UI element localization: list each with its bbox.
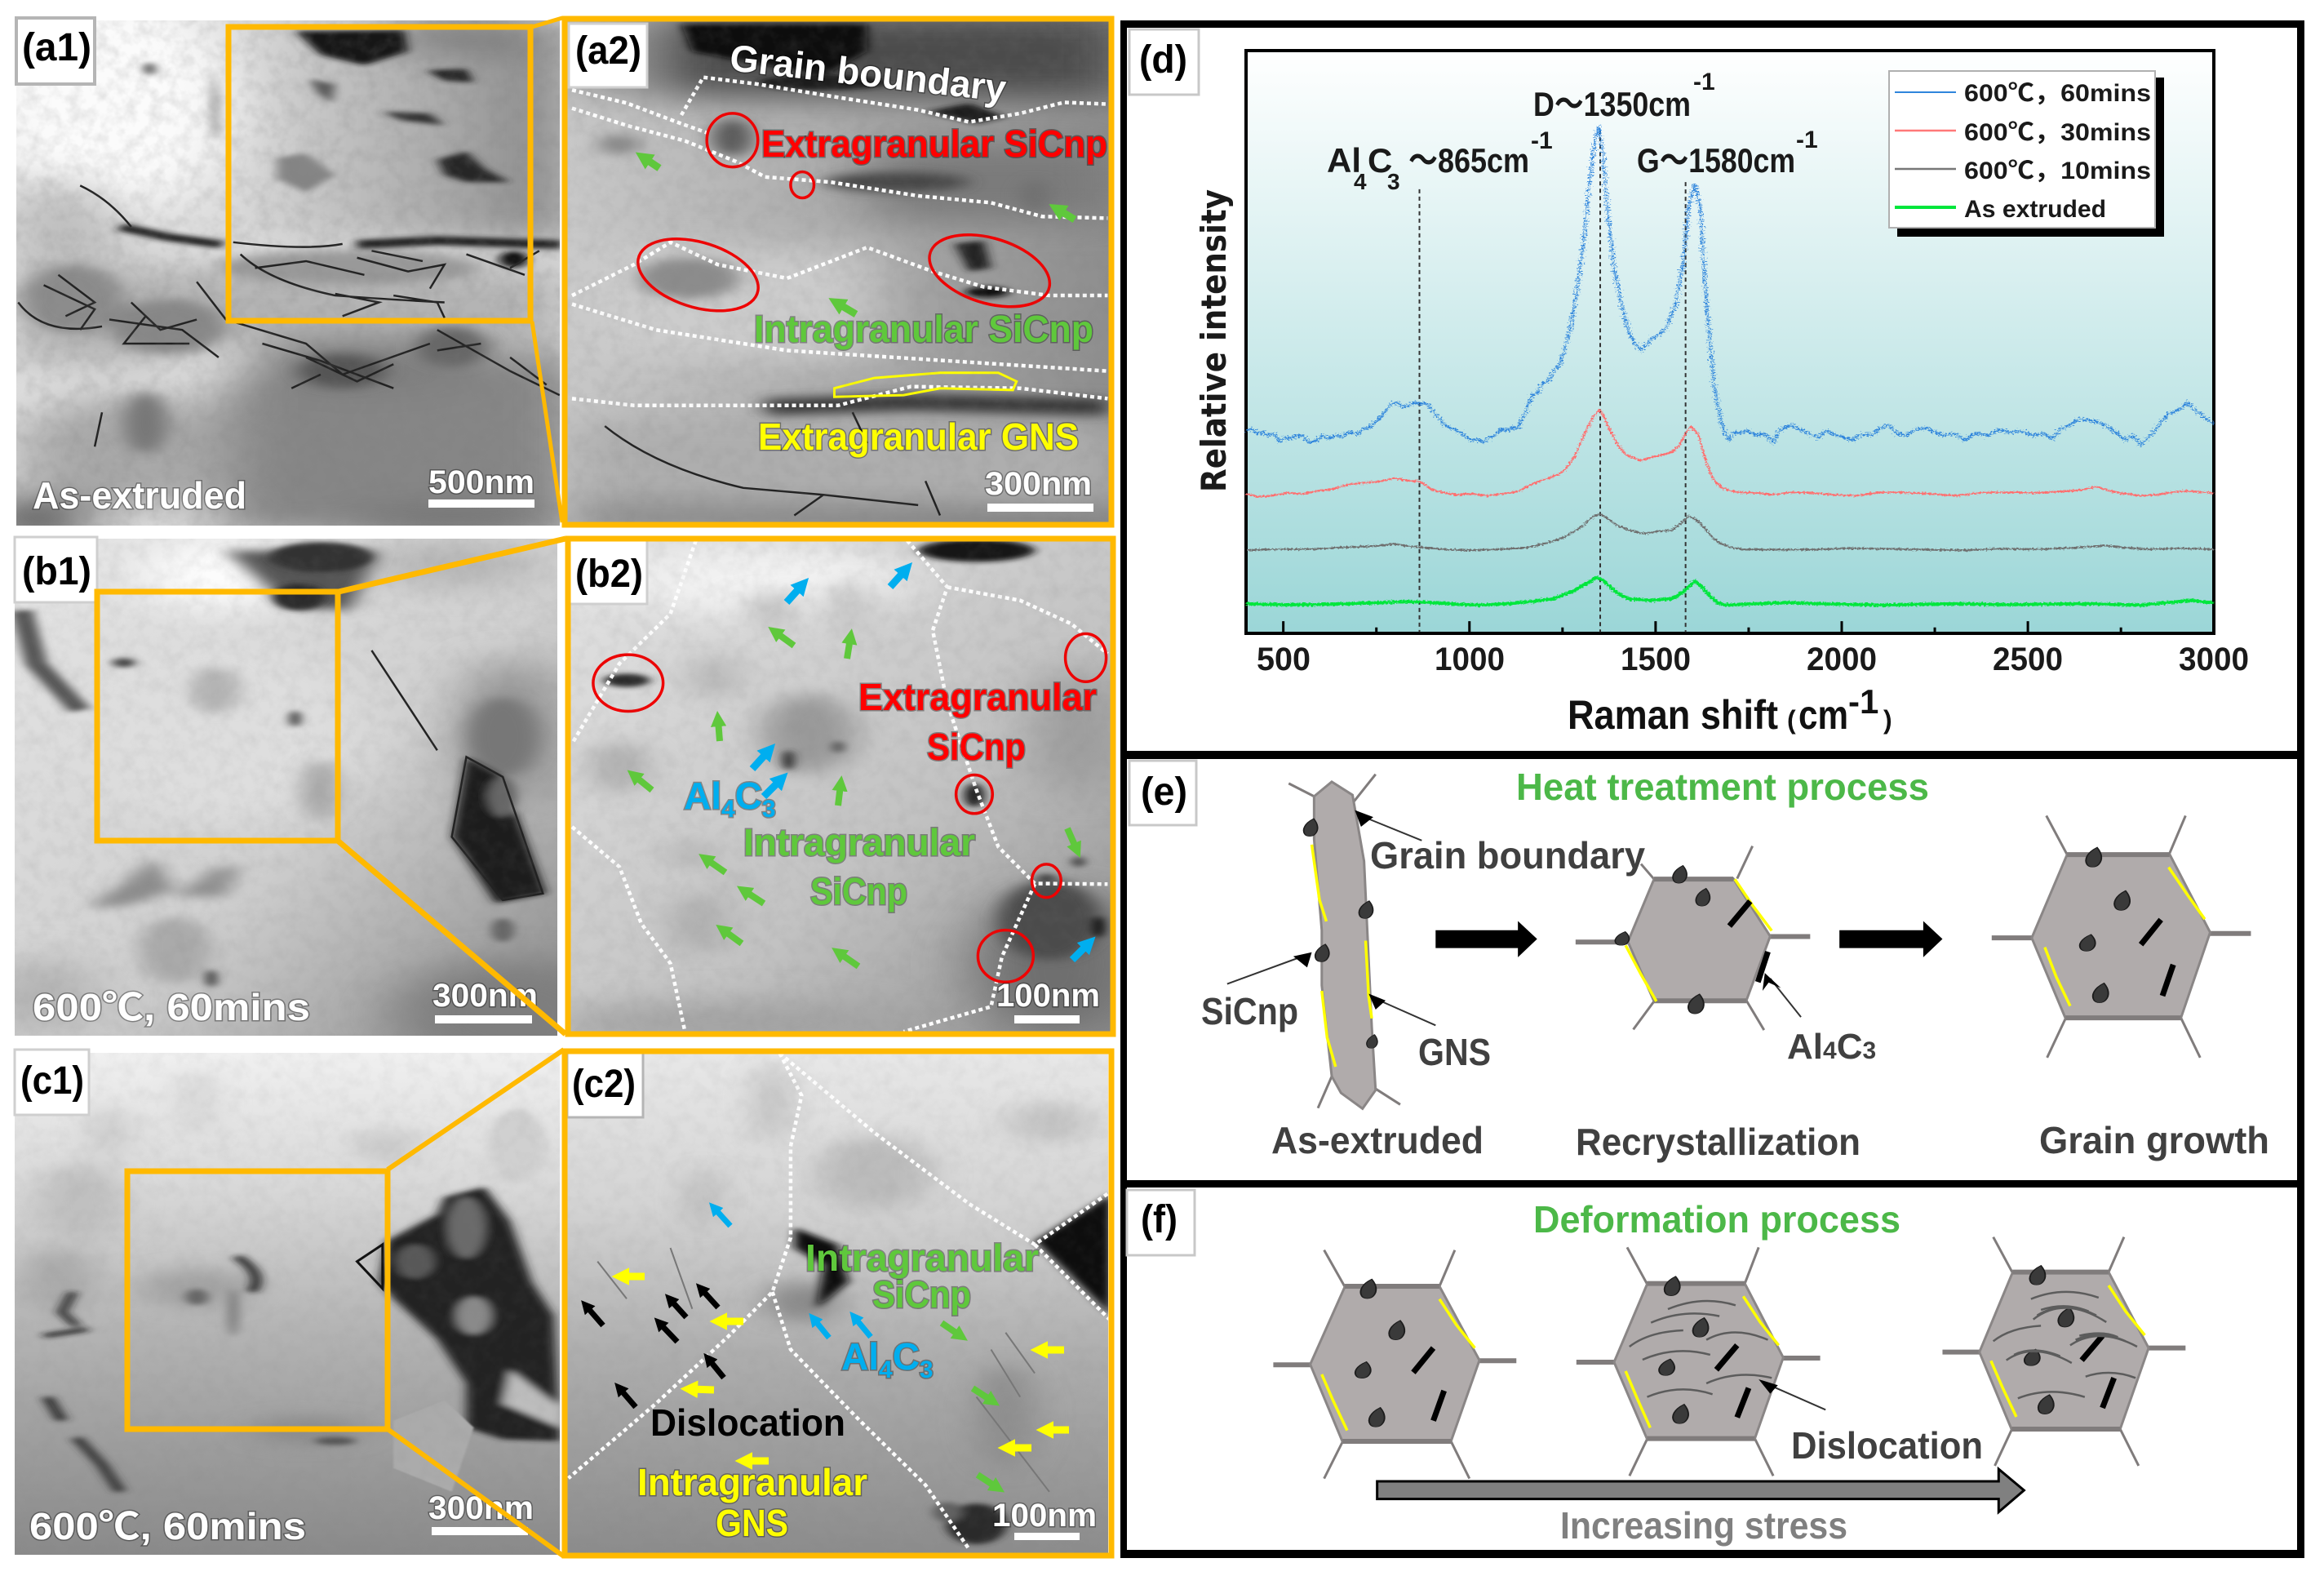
- annotation: Intragranular SiCnp b2: Intragranular: [743, 821, 975, 863]
- annotation: D band: D～1350cm: [1533, 85, 1691, 123]
- annotation: Intragranular GNS c2: GNS: [716, 1502, 788, 1544]
- x tick labels: 2000: [1807, 641, 1877, 677]
- stage label: Recrystallization: Recrystallization: [1576, 1121, 1861, 1163]
- panel: f deformation process: [1127, 1188, 2297, 1550]
- dotted grain boundaries: [572, 78, 1107, 406]
- heading: Deformation process: Deformation process: [1533, 1198, 1900, 1241]
- connector a1 to a2: [532, 18, 562, 522]
- scale bar 100nm c2: 100nm: [992, 1498, 1097, 1534]
- label e: (e): [1141, 770, 1187, 814]
- label f: (f): [1141, 1198, 1178, 1241]
- annotation: Al4C3 c2: Al: [841, 1335, 879, 1378]
- x axis title: (: [1787, 705, 1796, 735]
- annotation: G band: -1: [1796, 127, 1818, 153]
- panel: b2 TEM image: [571, 542, 1110, 1032]
- panel: e heat treatment process: [1127, 759, 2297, 1180]
- legend: [1889, 71, 2164, 237]
- label e: [1129, 761, 1196, 825]
- green arrows c2: [942, 1323, 996, 1487]
- annotation: Intragranular SiCnp b2: [743, 821, 975, 912]
- scale bar 300nm c1: 300nm: [428, 1490, 534, 1526]
- zoom box in a1: [228, 27, 530, 321]
- grain without dislocations: [1273, 1250, 1516, 1479]
- annotation: Al4C3 b2: C: [735, 775, 762, 817]
- annotation: Al4C3 band: Al: [1327, 141, 1361, 180]
- label a1: [16, 18, 95, 84]
- stage label: As-extruded: As-extruded: [1271, 1119, 1484, 1161]
- grain with dislocation pile-up: [1942, 1237, 2185, 1466]
- annotation: Dislocation c2: Dislocation: [650, 1401, 845, 1444]
- annotation: Al4C3 c2: C: [893, 1335, 920, 1378]
- grain with dislocations: [1577, 1247, 1825, 1476]
- annotation: Intragranular GNS c2: [637, 1461, 867, 1544]
- annotation: Intragranular SiCnp c2: [805, 1236, 1039, 1316]
- x tick labels: [1257, 641, 2249, 677]
- annotation: G band: G～1580cm: [1637, 141, 1795, 180]
- label c2: (c2): [572, 1063, 636, 1106]
- annotation: Al4C3 band: ～865cm: [1408, 141, 1529, 180]
- annotation: Al4C3 b2: 4: [721, 796, 735, 823]
- label d: (d): [1139, 38, 1187, 82]
- annotation: Al4C3 band: [1327, 127, 1553, 194]
- x tick labels: 1000: [1435, 641, 1505, 677]
- annotation: D band: [1533, 69, 1715, 123]
- x axis title: ): [1883, 705, 1892, 735]
- x axis title: -1: [1848, 682, 1878, 721]
- y axis title: Relative intensity: [1194, 189, 1234, 492]
- yellow outline: extragranular GNS: [834, 373, 1017, 397]
- frame a2: [565, 19, 1111, 525]
- dotted grain boundaries b2: [572, 540, 1107, 1032]
- label a2: [569, 24, 647, 87]
- callout: GNS: GNS: [1418, 1031, 1491, 1073]
- red circles: [614, 113, 1074, 321]
- caption: Increasing stress: Increasing stress: [1560, 1504, 1847, 1547]
- annotation: Al4C3 band: 3: [1387, 169, 1400, 194]
- panel: b1 TEM image: [13, 535, 557, 1036]
- process arrow 1: [1435, 921, 1537, 957]
- label b2: [570, 539, 647, 604]
- x tick labels: 3000: [2179, 641, 2249, 677]
- annotation: Al4C3 c2: 4: [879, 1356, 893, 1383]
- caption: As-extruded: As-extruded: [33, 474, 246, 517]
- label d: [1129, 29, 1199, 95]
- annotation: Al4C3 b2: Al: [684, 775, 721, 817]
- green arrows a2: [645, 158, 1075, 314]
- callout: Dislocation: Dislocation: [1791, 1424, 1983, 1467]
- green arrows b2: [635, 633, 1076, 966]
- stage label: Grain growth: Grain growth: [2039, 1119, 2269, 1161]
- process arrow 2: [1839, 921, 1942, 957]
- legend: As extruded: [1964, 196, 2106, 223]
- frame c2: [565, 1051, 1111, 1556]
- outer black frame of right panels: [1120, 20, 2304, 1558]
- schematic f: [1273, 1237, 2185, 1512]
- elongated as-extruded grain: [1288, 775, 1400, 1108]
- label f: [1127, 1190, 1195, 1255]
- blue arrows b2: [752, 570, 1088, 960]
- scale bar 300nm b1: 300nm: [432, 978, 538, 1014]
- legend: 600℃，60mins: [1964, 80, 2151, 107]
- zoom box in c1: [127, 1171, 388, 1429]
- annotation: Extragranular SiCnp b2: Extragranular: [858, 676, 1097, 718]
- recrystallized grain: [1576, 846, 1810, 1030]
- connector c1 to c2: [388, 1050, 564, 1556]
- black arrows c2: [587, 1290, 724, 1407]
- annotation: Al4C3 b2: 3: [762, 796, 776, 823]
- panel: a1 TEM image: [15, 16, 560, 526]
- legend: 600℃，10mins: [1964, 158, 2151, 184]
- grown grain: [1992, 815, 2251, 1058]
- x axis title: cm: [1798, 692, 1848, 738]
- scale bar 100nm b2: 100nm: [996, 978, 1100, 1014]
- callout: SiCnp: SiCnp: [1201, 990, 1298, 1032]
- x tick labels: 2500: [1993, 641, 2063, 677]
- x tick labels: 500: [1257, 641, 1311, 677]
- annotation: Intragranular GNS c2: Intragranular: [637, 1461, 867, 1503]
- x tick labels: 1500: [1621, 641, 1691, 677]
- annotation: Grain boundary: Grain boundary: [728, 36, 1009, 109]
- plot area: [1246, 51, 2214, 633]
- annotation: Al4C3 c2: 3: [920, 1356, 934, 1383]
- x axis title: [1568, 682, 1892, 738]
- callout: Grain boundary: Grain boundary: [1370, 834, 1645, 877]
- panel: d Raman spectra: [1127, 28, 2297, 751]
- legend: 600℃，30mins: [1964, 119, 2151, 146]
- label c1: [15, 1050, 89, 1115]
- increasing stress arrow: [1377, 1469, 2024, 1512]
- x axis ticks: [1284, 621, 2121, 633]
- curve: As extruded: [1246, 578, 2214, 605]
- connector b1 to b2: [339, 539, 565, 1034]
- dashed guide lines: [1419, 130, 1686, 633]
- blue arrows c2: [715, 1209, 871, 1338]
- label b1: [15, 537, 97, 602]
- label c2: [567, 1053, 643, 1117]
- curve: 600C 30mins: [1246, 410, 2214, 497]
- panel: c2 TEM image: [565, 1053, 1111, 1553]
- curve: 600C 60mins: [1246, 127, 2214, 445]
- label b1: (b1): [22, 550, 91, 593]
- callout: Al4C3: Al4C3: [1787, 1027, 1876, 1067]
- scale bar 300nm a2: 300nm: [985, 466, 1092, 502]
- scale bar 500nm: 500nm: [428, 464, 534, 500]
- schematic e: [1227, 775, 2251, 1108]
- label a2: (a2): [575, 29, 641, 73]
- label c1: (c1): [20, 1059, 84, 1103]
- annotation: Intragranular SiCnp b2: SiCnp: [810, 870, 907, 912]
- annotation: Extragranular SiCnp b2: [858, 676, 1097, 768]
- annotation: Al4C3 band: 4: [1354, 169, 1367, 194]
- annotation: D band: -1: [1693, 69, 1715, 95]
- x axis title: Raman shift: [1568, 692, 1778, 738]
- annotation: Intragranular SiCnp c2: Intragranular: [805, 1236, 1039, 1279]
- annotation: Al4C3 band: -1: [1531, 127, 1553, 154]
- annotation: Extragranular SiCnp: Extragranular SiCnp: [761, 122, 1107, 165]
- label b2: (b2): [575, 553, 643, 596]
- frame b2: [568, 539, 1113, 1034]
- dotted grain boundaries c2: [569, 1053, 1109, 1549]
- caption: 600℃, 60mins b1: 600℃, 60mins: [33, 986, 310, 1028]
- annotation: Intragranular SiCnp c2: SiCnp: [872, 1273, 971, 1316]
- annotation: Extragranular GNS: Extragranular GNS: [758, 415, 1079, 458]
- leader arrows: [1227, 810, 1435, 1025]
- red circles b2: [593, 633, 1107, 982]
- zoom box in b1: [97, 592, 338, 841]
- yellow arrows c2: [623, 1276, 1069, 1461]
- caption: 600℃, 60mins c1: 600℃, 60mins: [29, 1505, 306, 1547]
- spectra chart: [1246, 127, 2214, 633]
- curve: 600C 10mins: [1246, 513, 2214, 550]
- panel: c1 TEM image: [15, 1050, 560, 1555]
- annotation: Intragranular SiCnp: Intragranular SiCnp: [754, 308, 1093, 350]
- annotation: Extragranular SiCnp b2: SiCnp: [927, 726, 1026, 768]
- label a1: (a1): [22, 26, 91, 69]
- annotation: Al4C3 band: C: [1368, 141, 1392, 180]
- heading: Heat treatment process: Heat treatment process: [1516, 766, 1929, 808]
